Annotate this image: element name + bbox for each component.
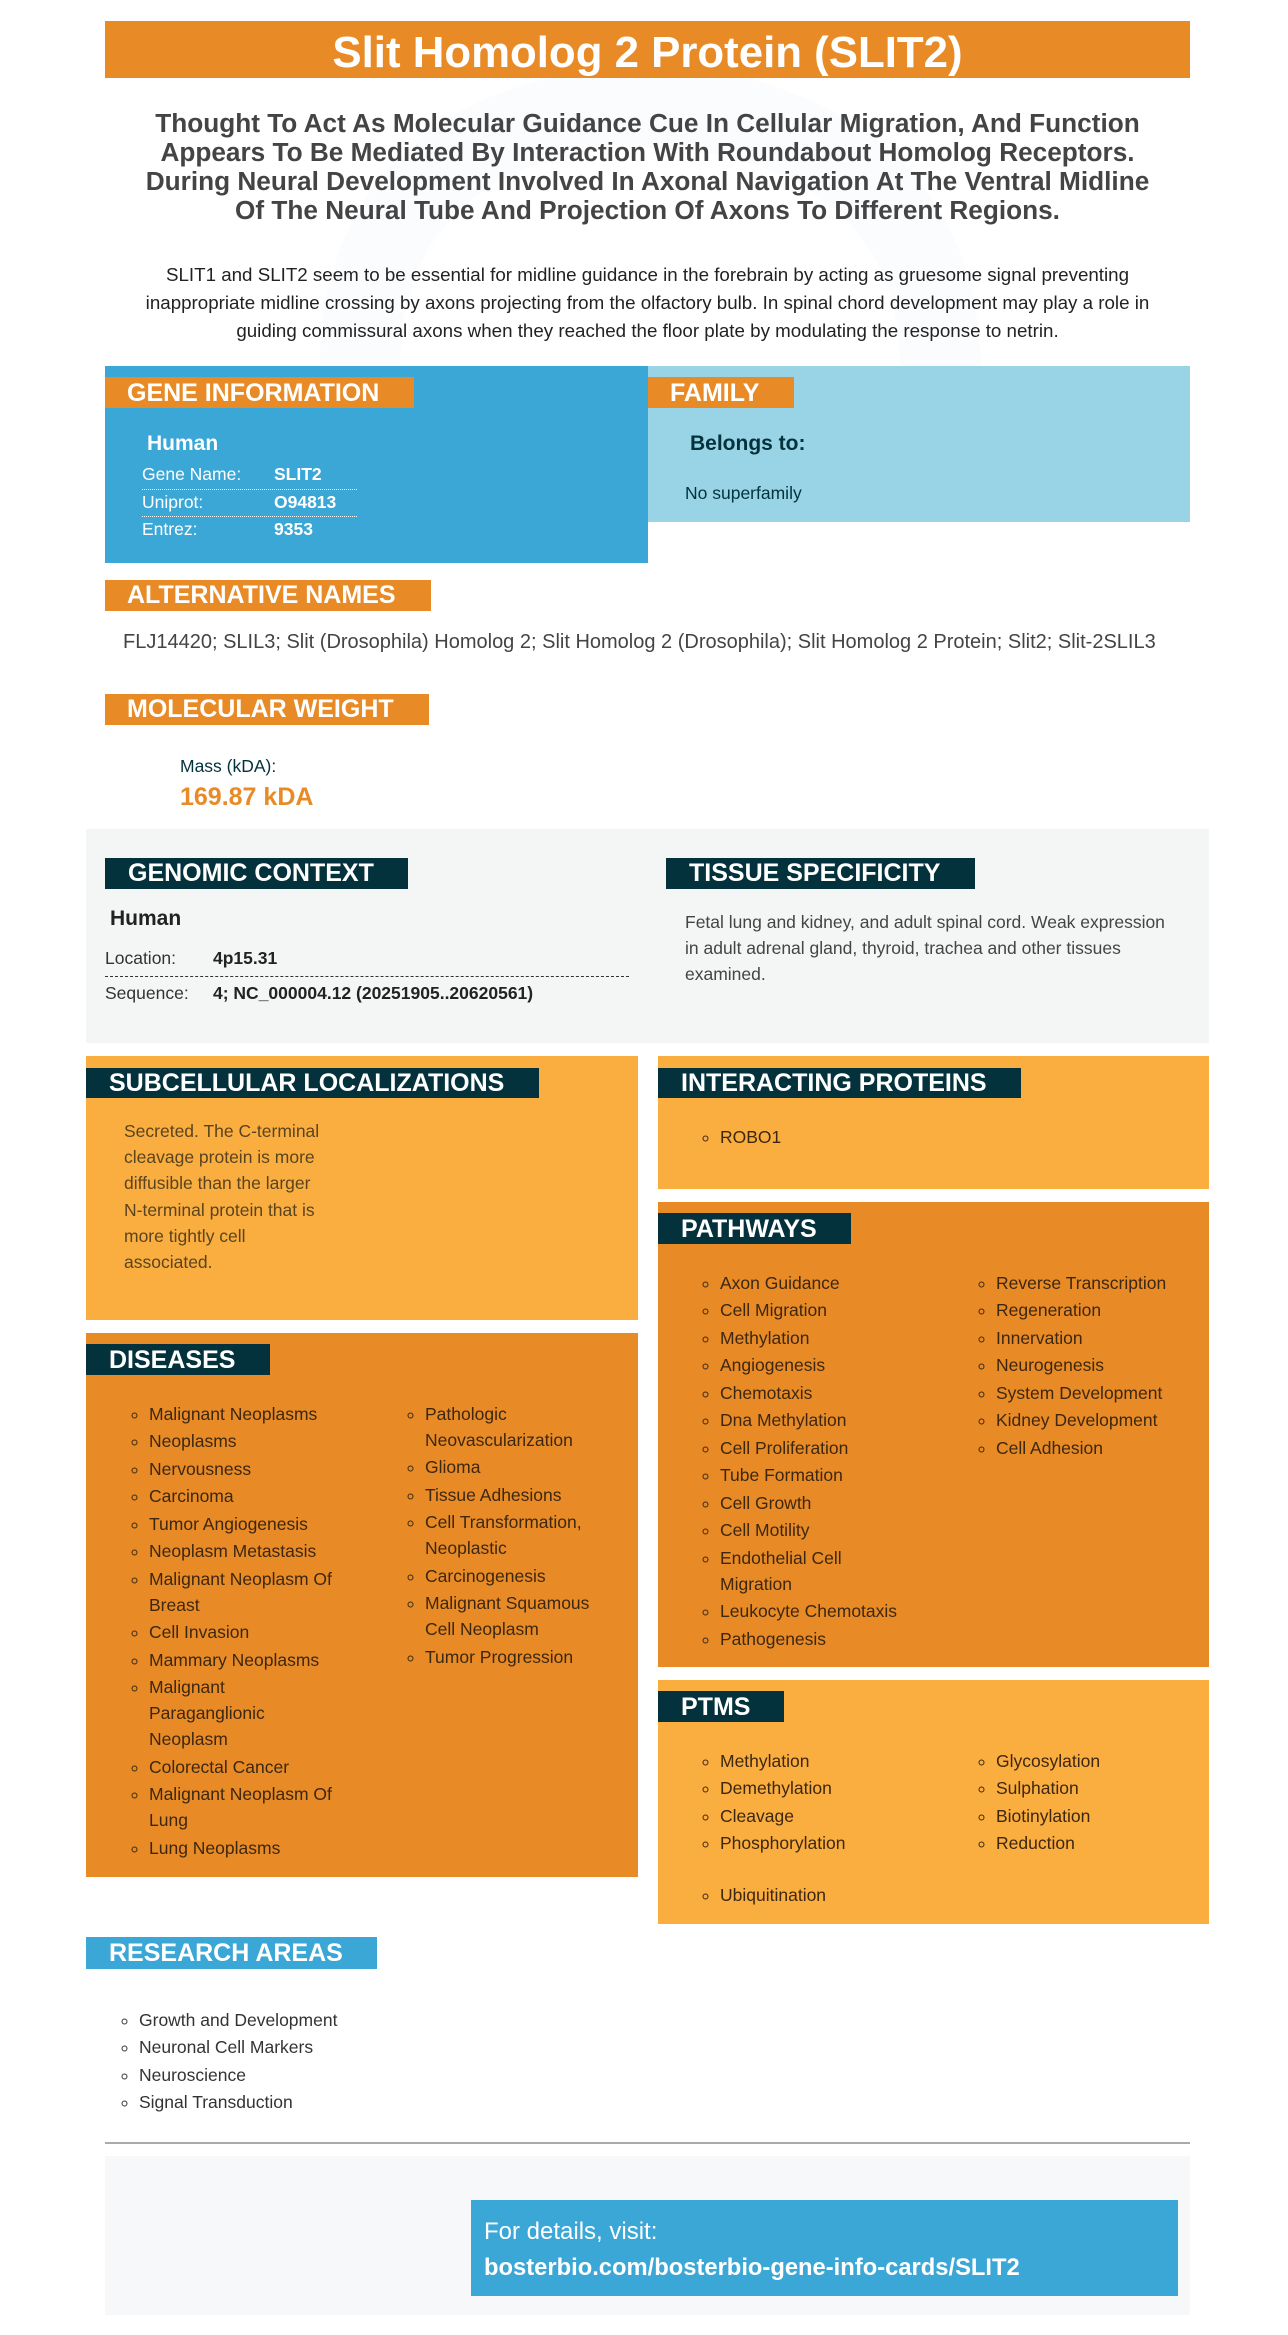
species: Human (110, 907, 181, 930)
list: diseases column 2: Neovascularization (425, 1430, 573, 1450)
list: pathways column 1: Angiogenesis (720, 1355, 825, 1375)
gene rows: Entrez: (142, 519, 197, 539)
list: pathways column 2: Innervation (996, 1328, 1083, 1348)
panel: diseases (86, 1333, 638, 1877)
text (124, 1121, 319, 1272)
list: ptms column 2: Glycosylation (996, 1751, 1100, 1771)
description: guiding commissural axons when they reached the floor plate by modulating the response to netrin. (236, 320, 1059, 341)
heading: family (648, 377, 794, 408)
heading: interacting proteins: INTERACTING PROTEINS (681, 1069, 987, 1097)
list: diseases column 2: Malignant Squamous (425, 1593, 589, 1613)
list: pathways column 1: Cell Migration (720, 1300, 827, 1320)
heading: pathways (658, 1213, 851, 1244)
list: diseases column 1 (132, 1404, 332, 1858)
list: diseases column 1: Malignant Neoplasm Of (149, 1784, 332, 1804)
list: diseases column 2: Glioma (425, 1457, 480, 1477)
list: pathways column 1: Dna Methylation (720, 1410, 846, 1430)
list: diseases column 2: Tumor Progression (425, 1647, 573, 1667)
panel: family (648, 366, 1190, 522)
heading: gene information: GENE INFORMATION (127, 379, 379, 407)
list: diseases column 1: Colorectal Cancer (149, 1757, 289, 1777)
gene rows (142, 464, 357, 539)
list: diseases column 1: Nervousness (149, 1459, 251, 1479)
list: pathways column 1: Cell Growth (720, 1493, 811, 1513)
heading: ptms: PTMS (681, 1693, 750, 1721)
title: Slit Homolog 2 Protein (SLIT2) (332, 28, 963, 77)
list: ptms column 1 (702, 1751, 846, 1905)
list: diseases column 1: Neoplasm Metastasis (149, 1541, 316, 1561)
panel: interacting proteins (658, 1056, 1209, 1189)
heading: subcellular localizations: SUBCELLULAR LOCALIZATIONS (109, 1069, 504, 1097)
subtitle: During Neural Development Involved In Axonal Navigation At The Ventral Midline (146, 166, 1149, 196)
tissue text (685, 912, 1165, 984)
heading: ptms (658, 1691, 784, 1722)
heading: pathways: PATHWAYS (681, 1215, 817, 1243)
list: diseases column 1: Breast (149, 1595, 200, 1615)
list: diseases column 1: Lung (149, 1810, 188, 1830)
list: pathways column 2 (978, 1273, 1166, 1458)
mass value: 169.87 kDA (180, 783, 313, 811)
text: more tightly cell (124, 1226, 246, 1246)
list: pathways column 1: Axon Guidance (720, 1273, 840, 1293)
subtitle (146, 108, 1149, 225)
panel: subcellular localizations (86, 1056, 638, 1320)
list: diseases column 1: Tumor Angiogenesis (149, 1514, 308, 1534)
list: pathways column 1: Cell Proliferation (720, 1438, 848, 1458)
gene rows: Gene Name: (142, 464, 241, 484)
list: pathways column 1: Endothelial Cell (720, 1548, 842, 1568)
list: pathways column 2: Regeneration (996, 1300, 1101, 1320)
genomic rows: 4p15.31 (213, 948, 277, 968)
description: inappropriate midline crossing by axons projecting from the olfactory bulb. In spinal chord development may play a role in (146, 292, 1149, 313)
watermark logo (300, 78, 1000, 366)
belongs to: Belongs to: (690, 432, 806, 455)
heading: family: FAMILY (670, 379, 759, 407)
text: N-terminal protein that is (124, 1200, 315, 1220)
list: diseases column 2: Tissue Adhesions (425, 1485, 562, 1505)
gene rows: SLIT2 (274, 464, 322, 484)
tissue text: examined. (685, 964, 766, 984)
callout text: For details, visit: (484, 2218, 657, 2245)
list: pathways column 1: Migration (720, 1574, 792, 1594)
description: SLIT1 and SLIT2 seem to be essential for midline guidance in the forebrain by acting as gruesome signal preventing (166, 264, 1129, 285)
list: ptms column 1: Cleavage (720, 1806, 794, 1826)
list: diseases column 1: Neoplasm (149, 1729, 228, 1749)
subtitle: Of The Neural Tube And Projection Of Axons To Different Regions. (235, 195, 1060, 225)
genomic rows: Location: (105, 948, 176, 968)
list: diseases column 1: Neoplasms (149, 1431, 237, 1451)
list: ptms column 1: Ubiquitination (720, 1885, 826, 1905)
list: research areas: Signal Transduction (139, 2092, 293, 2112)
list: pathways column 1: Cell Motility (720, 1520, 809, 1540)
list: diseases column 1: Malignant Neoplasms (149, 1404, 317, 1424)
mass label: Mass (kDA): (180, 756, 276, 776)
tissue text: Fetal lung and kidney, and adult spinal cord. Weak expression (685, 912, 1165, 932)
panel: pathways (658, 1202, 1209, 1667)
list: pathways column 1: Chemotaxis (720, 1383, 812, 1403)
heading: genomic context: GENOMIC CONTEXT (128, 859, 374, 887)
heading: diseases (86, 1344, 270, 1375)
genomic rows: 4; NC_000004.12 (20251905..20620561) (213, 983, 533, 1003)
text: Secreted. The C-terminal (124, 1121, 319, 1141)
list: diseases column 2 (408, 1404, 589, 1667)
divider (105, 2142, 1190, 2144)
list: pathways column 1 (702, 1273, 897, 1649)
list: pathways column 1: Pathogenesis (720, 1629, 826, 1649)
gene rows: O94813 (274, 492, 336, 512)
genomic rows (105, 948, 629, 1003)
list: research areas: Neuronal Cell Markers (139, 2037, 313, 2057)
list: proteins: ROBO1 (720, 1127, 781, 1147)
list: pathways column 2: System Development (996, 1383, 1162, 1403)
list: research areas: Neuroscience (139, 2065, 246, 2085)
list: diseases column 2: Cell Transformation, (425, 1512, 582, 1532)
list: diseases column 1: Carcinoma (149, 1486, 234, 1506)
subtitle: Appears To Be Mediated By Interaction With Roundabout Homolog Receptors. (160, 137, 1135, 167)
panel: genomic and tissue (86, 829, 1209, 1043)
panel: gene information (105, 366, 648, 563)
text: diffusible than the larger (124, 1173, 310, 1193)
heading: molecular weight: MOLECULAR WEIGHT (127, 695, 394, 723)
gene rows: 9353 (274, 519, 313, 539)
list: pathways column 1: Tube Formation (720, 1465, 843, 1485)
tissue text: in adult adrenal gland, thyroid, trachea and other tissues (685, 938, 1121, 958)
list: diseases column 2: Neoplastic (425, 1538, 507, 1558)
species: Human (147, 432, 218, 455)
title (105, 21, 1190, 78)
callout text (484, 2218, 1020, 2281)
list: pathways column 2: Neurogenesis (996, 1355, 1104, 1375)
list: pathways column 2: Cell Adhesion (996, 1438, 1103, 1458)
list: ptms column 1: Demethylation (720, 1778, 832, 1798)
list: pathways column 2: Reverse Transcription (996, 1273, 1166, 1293)
alternative names text: FLJ14420; SLIL3; Slit (Drosophila) Homolog 2; Slit Homolog 2 (Drosophila); Slit Homolog 2 Protein; Slit2; Slit-2SLIL3 (123, 631, 1156, 653)
list: diseases column 2: Cell Neoplasm (425, 1619, 539, 1639)
list: pathways column 1: Methylation (720, 1328, 810, 1348)
text: cleavage protein is more (124, 1147, 315, 1167)
heading: diseases: DISEASES (109, 1346, 235, 1374)
panel: ptms (658, 1680, 1209, 1924)
list: ptms column 2: Sulphation (996, 1778, 1079, 1798)
list: ptms column 2: Reduction (996, 1833, 1075, 1853)
list: diseases column 1: Paraganglionic (149, 1703, 265, 1723)
footer panel (105, 2156, 1190, 2315)
list: diseases column 1: Malignant (149, 1677, 225, 1697)
list: ptms column 2 (978, 1751, 1100, 1853)
list: ptms column 1: Methylation (720, 1751, 810, 1771)
list: diseases column 2: Carcinogenesis (425, 1566, 546, 1586)
text: associated. (124, 1252, 213, 1272)
list: ptms column 1: Phosphorylation (720, 1833, 846, 1853)
callout text: bosterbio.com/bosterbio-gene-info-cards/SLIT2 (484, 2254, 1020, 2281)
callout: details (471, 2200, 1178, 2296)
list: ptms column 2: Biotinylation (996, 1806, 1090, 1826)
list: diseases column 1: Lung Neoplasms (149, 1838, 280, 1858)
genomic rows: Sequence: (105, 983, 189, 1003)
list: diseases column 1: Mammary Neoplasms (149, 1650, 319, 1670)
heading: alternative names: ALTERNATIVE NAMES (127, 581, 396, 609)
list: diseases column 1: Cell Invasion (149, 1622, 249, 1642)
subtitle: Thought To Act As Molecular Guidance Cue In Cellular Migration, And Function (155, 108, 1140, 138)
list: pathways column 2: Kidney Development (996, 1410, 1157, 1430)
heading: research areas: RESEARCH AREAS (109, 1939, 343, 1967)
list: diseases column 2: Pathologic (425, 1404, 507, 1424)
heading: tissue specificity: TISSUE SPECIFICITY (689, 859, 940, 887)
list: diseases column 1: Malignant Neoplasm Of (149, 1569, 332, 1589)
family text: No superfamily (685, 483, 802, 503)
gene rows: Uniprot: (142, 492, 203, 512)
list: research areas: Growth and Development (139, 2010, 337, 2030)
description (146, 264, 1149, 341)
list: pathways column 1: Leukocyte Chemotaxis (720, 1601, 897, 1621)
list: research areas (122, 2010, 338, 2112)
